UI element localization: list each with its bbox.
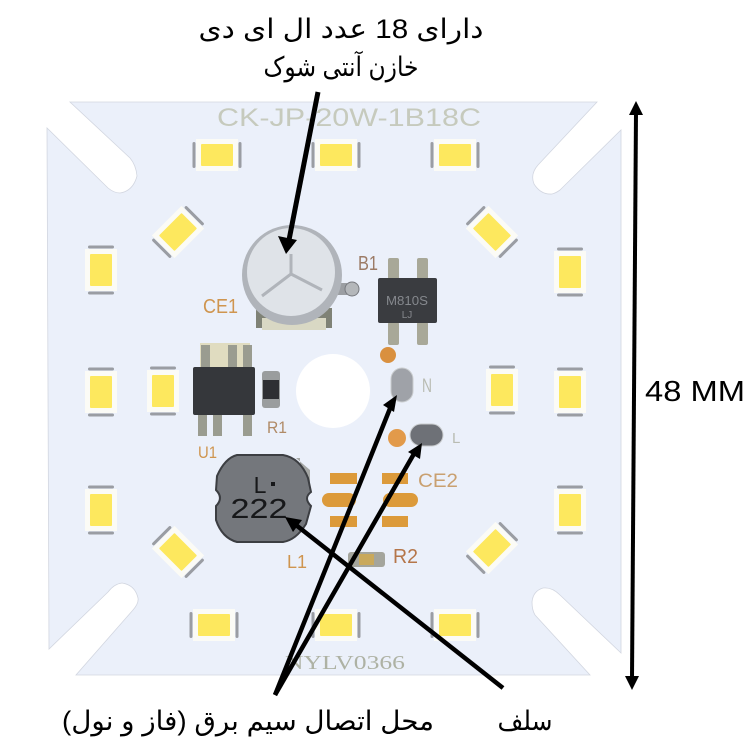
label: inductor: سلف xyxy=(498,706,552,736)
title: anti-shock capacitor: خازن آنتی شوک xyxy=(264,51,418,83)
label N: N xyxy=(422,376,432,397)
inductor 222: 222 xyxy=(230,493,288,524)
label L: L xyxy=(452,430,460,447)
dimension arrow 48 MM xyxy=(625,101,643,690)
inductor 222 xyxy=(216,455,311,542)
LEDs: 18 chip array xyxy=(85,139,586,641)
label R2: R2 xyxy=(393,546,418,568)
resistor R2 xyxy=(348,552,385,567)
arrow: to inductor xyxy=(285,517,503,688)
label U1: U1 xyxy=(198,443,217,462)
panel: LED circuit board xyxy=(47,102,621,675)
mounting hole xyxy=(296,354,370,428)
IC chip U1 xyxy=(193,343,255,436)
resistor R1 xyxy=(262,371,280,408)
board serial marking: NYLV0366 xyxy=(285,652,405,674)
bridge rectifier chip MB10S: LJ xyxy=(402,310,412,321)
label: wire connection point: محل اتصال سیم برق (فاز و نول) xyxy=(62,706,434,737)
arrow: to phase pad xyxy=(275,443,422,695)
board outline xyxy=(47,102,621,675)
label B1: B1 xyxy=(358,253,378,275)
bridge rectifier chip MB10S: M810S xyxy=(386,293,428,308)
label CE1: CE1 xyxy=(203,296,238,318)
phase solder pad L xyxy=(410,424,443,446)
capacitor pads CE2 xyxy=(322,473,418,527)
dimension label: 48 MM xyxy=(645,376,745,408)
label CE2: CE2 xyxy=(418,471,458,492)
arrow: to capacitor xyxy=(278,92,318,254)
title: 18 LEDs: دارای 18 عدد ال ای دی xyxy=(198,14,483,45)
bridge rectifier chip MB10S xyxy=(378,258,437,345)
solder pad dot upper xyxy=(380,347,396,363)
arrow: to neutral pad xyxy=(275,395,397,695)
label L1: L1 xyxy=(287,552,307,572)
board model marking: CK-JP-20W-1B18C xyxy=(217,104,481,132)
inductor 222: L xyxy=(254,472,267,498)
solder pad dot lower xyxy=(388,429,406,447)
label R1: R1 xyxy=(267,418,287,437)
capacitor CE1 xyxy=(242,225,359,330)
neutral solder pad N xyxy=(391,368,413,402)
